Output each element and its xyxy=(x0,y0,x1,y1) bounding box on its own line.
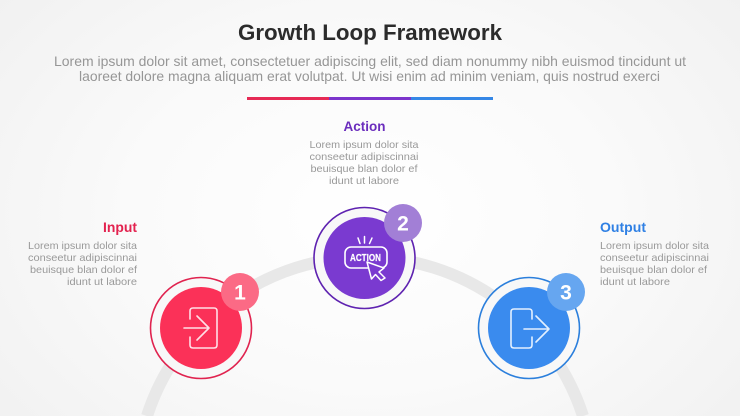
step 2: action text: idunt ut labore xyxy=(329,175,399,187)
step 1: input text xyxy=(28,219,137,288)
step 3: node xyxy=(478,273,585,378)
icon: action button with cursor: ACTION xyxy=(350,253,381,264)
step 2: action text: conseetur adipiscinnai xyxy=(310,151,418,163)
step 2: action text: Lorem ipsum dolor sita xyxy=(310,139,419,151)
subtitle text: Lorem ipsum dolor sit amet, consectetuer adipiscing elit, sed diam nonummy nibh euismod tincidunt ut xyxy=(54,53,686,69)
title: Growth Loop Framework xyxy=(238,20,503,45)
subtitle text: laoreet dolore magna aliquam erat volutpat. Ut wisi enim ad minim veniam, quis nostrud exerci xyxy=(79,68,660,84)
step 3: output text: conseetur adipiscinnai xyxy=(600,252,709,264)
tricolor divider xyxy=(247,97,493,100)
step 1: input text: Lorem ipsum dolor sita xyxy=(28,240,137,252)
step 1: node xyxy=(150,273,259,378)
step 3: output text: beuisque blan dolor ef xyxy=(600,264,707,276)
step 1: input text: beuisque blan dolor ef xyxy=(30,264,137,276)
icon: enter door xyxy=(184,308,217,348)
step 3: output text xyxy=(600,219,709,288)
badge 2: 2 xyxy=(397,212,409,236)
step 2: action text xyxy=(310,118,419,187)
subtitle text xyxy=(54,53,686,84)
step 3: output text: idunt ut labore xyxy=(600,276,670,288)
step 2: node xyxy=(314,204,422,308)
step 3: output text: Lorem ipsum dolor sita xyxy=(600,240,709,252)
badge 1: 1 xyxy=(234,282,246,304)
step 2: action text: Action xyxy=(344,118,386,134)
step 1: input text: Input xyxy=(103,219,137,235)
icon: exit door xyxy=(511,309,549,348)
step 2: action text: beuisque blan dolor ef xyxy=(310,163,418,175)
step 1: input text: idunt ut labore xyxy=(67,276,137,288)
step 3: output text: Output xyxy=(600,219,646,235)
step 1: input text: conseetur adipiscinnai xyxy=(28,252,137,264)
badge 3: 3 xyxy=(560,282,572,304)
loop arc xyxy=(147,257,583,416)
